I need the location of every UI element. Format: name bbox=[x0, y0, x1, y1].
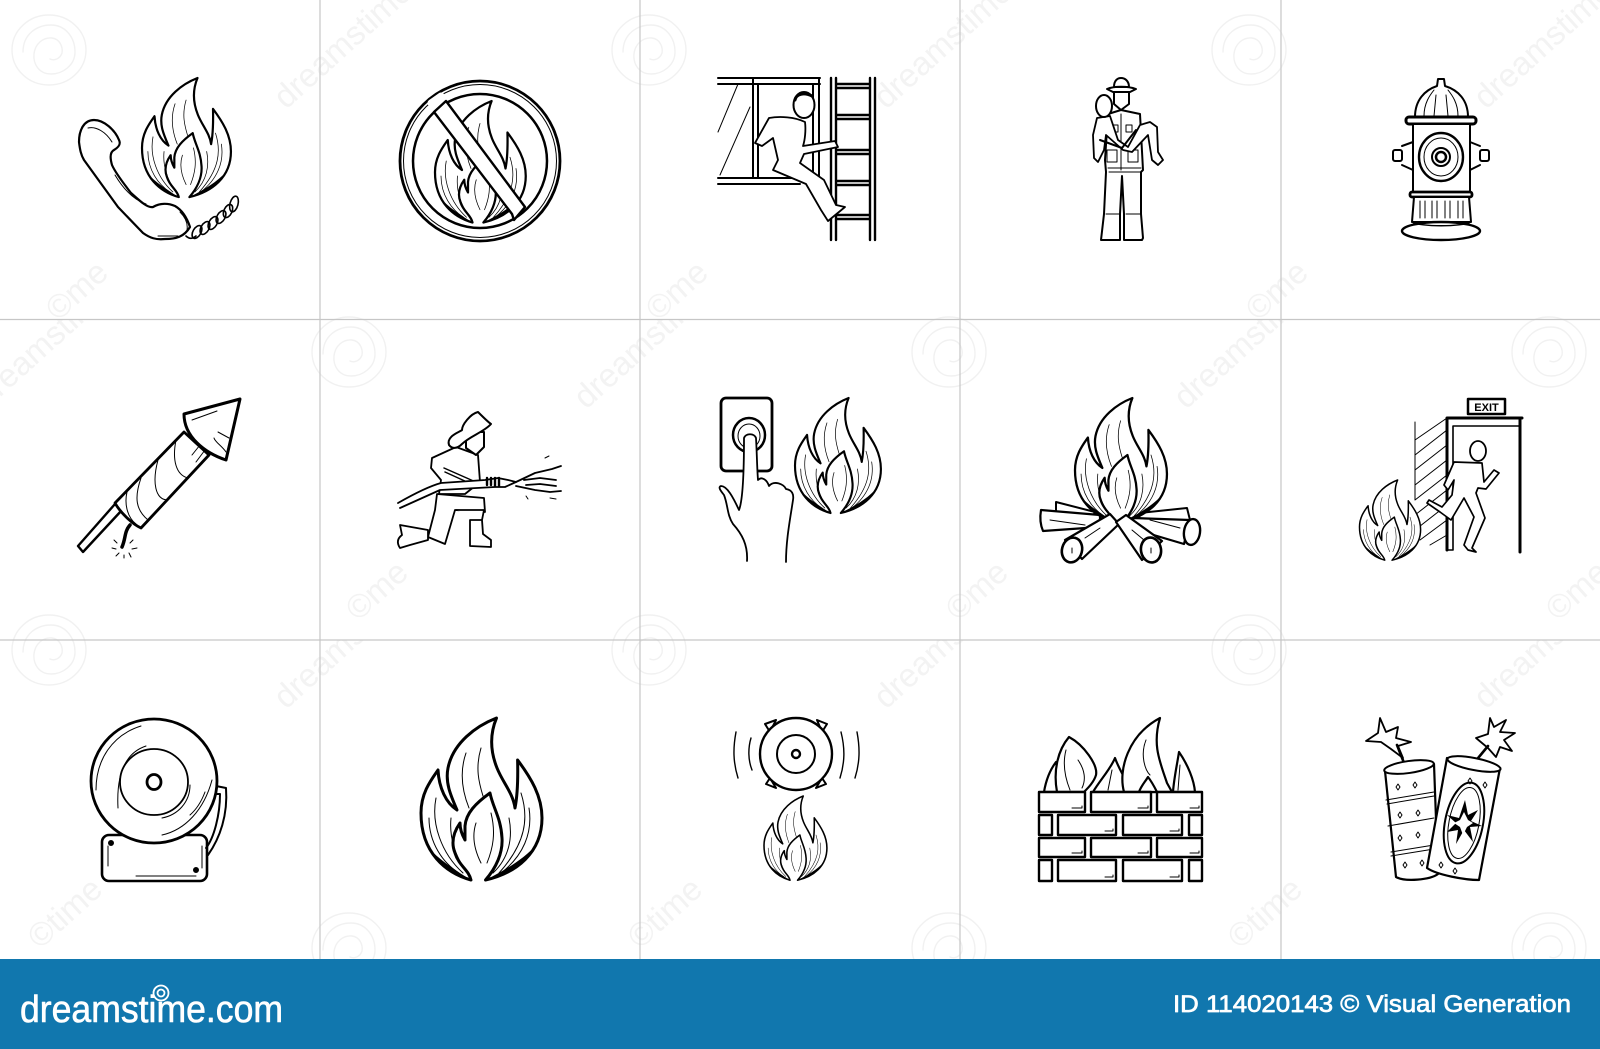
ladder bbox=[831, 78, 875, 240]
sound waves bbox=[734, 732, 859, 778]
icon: phone with flame bbox=[79, 78, 240, 240]
bell dome bbox=[91, 719, 217, 843]
icon: running to exit bbox=[1360, 399, 1522, 560]
watermark text: ©time bbox=[20, 870, 109, 955]
exit sign: EXIT bbox=[1474, 402, 1499, 414]
head and helmet bbox=[466, 432, 484, 455]
icon: fire alarm bell bbox=[91, 719, 226, 881]
watermark text: dreamstime bbox=[566, 272, 719, 415]
hand bbox=[720, 434, 793, 562]
prohibition bar bbox=[434, 101, 525, 220]
mounting plate bbox=[102, 835, 207, 881]
watermark text: ©time bbox=[620, 870, 709, 955]
icon: no fire sign bbox=[400, 81, 560, 241]
hatched wall bbox=[1415, 418, 1447, 545]
back logs bbox=[1056, 502, 1095, 522]
icon: flame bbox=[421, 718, 542, 880]
watermark text: ©me bbox=[38, 253, 115, 327]
logo text: dreamstime.com bbox=[20, 989, 283, 1031]
person bbox=[755, 117, 845, 221]
logo spiral bbox=[154, 986, 168, 1000]
bricks bbox=[1039, 792, 1202, 881]
flame bbox=[435, 101, 526, 222]
icon: firecrackers bbox=[1366, 718, 1515, 880]
person bbox=[1427, 462, 1499, 552]
alarm bell bbox=[760, 718, 832, 790]
torso bbox=[431, 447, 480, 494]
flames bbox=[1044, 718, 1195, 792]
exit sign bbox=[1468, 399, 1505, 414]
sparks bbox=[1366, 718, 1411, 758]
flame bbox=[1360, 480, 1421, 560]
window frame bbox=[718, 78, 820, 184]
fuse and sparks bbox=[122, 525, 130, 547]
icon: firefighter with hose bbox=[398, 412, 561, 548]
carried person bbox=[1093, 116, 1163, 165]
handset bbox=[79, 120, 190, 239]
coiled cord bbox=[186, 195, 240, 240]
icon: firework rocket bbox=[78, 399, 240, 558]
icon: firefighter carrying person bbox=[1093, 78, 1163, 240]
flame bbox=[142, 78, 231, 197]
flame bbox=[1075, 398, 1167, 521]
right cracker bbox=[1427, 758, 1500, 880]
watermark text: dreamstime bbox=[1166, 272, 1319, 415]
legs bbox=[428, 494, 485, 544]
watermark text: ©me bbox=[338, 553, 415, 627]
fuses bbox=[1397, 745, 1488, 768]
flame bbox=[795, 398, 881, 513]
arm bbox=[206, 786, 226, 855]
icon: fire hydrant bbox=[1393, 79, 1489, 240]
watermark text: ©me bbox=[938, 553, 1015, 627]
water spray bbox=[516, 466, 561, 492]
icon: escape from window to ladder bbox=[718, 78, 875, 240]
door frame bbox=[1447, 418, 1522, 552]
icon: alarm button with hand bbox=[720, 398, 881, 562]
icon: burning brick wall bbox=[1039, 718, 1202, 881]
image id and author: ID 114020143 © Visual Generation bbox=[1173, 991, 1571, 1018]
flame bbox=[764, 796, 827, 880]
hose bbox=[398, 478, 516, 508]
panel bbox=[721, 398, 772, 471]
front logs bbox=[1065, 514, 1119, 559]
footer bar bbox=[0, 959, 1600, 1049]
watermark text: dreamstime bbox=[866, 572, 1019, 715]
nose cone bbox=[184, 399, 240, 460]
watermark text: ©me bbox=[638, 253, 715, 327]
stick bbox=[78, 504, 122, 552]
helmet bbox=[1107, 78, 1136, 92]
alarm ears bbox=[765, 720, 827, 788]
watermark text: dreamstime bbox=[266, 572, 419, 715]
watermark text: ©time bbox=[1220, 870, 1309, 955]
firefighter body bbox=[1101, 110, 1143, 240]
watermark text: ©me bbox=[1238, 253, 1315, 327]
left cracker bbox=[1385, 764, 1438, 880]
rocket body bbox=[115, 432, 209, 528]
icon: campfire bbox=[1040, 398, 1202, 565]
icon: alarm with flame bbox=[734, 718, 859, 880]
